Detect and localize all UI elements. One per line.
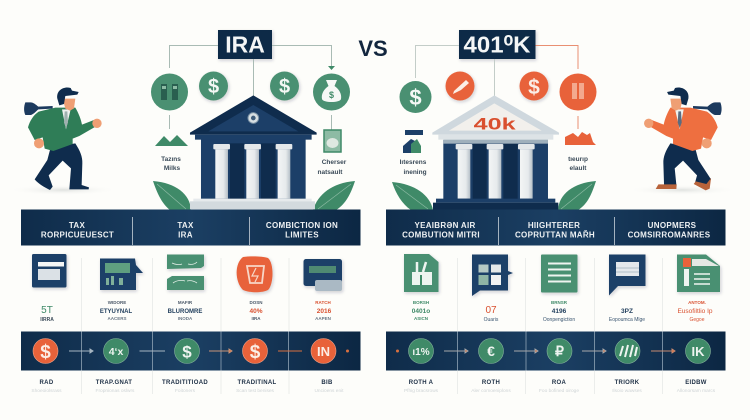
stat: column 5 [677,300,713,323]
stat: column 1: 5T [41,305,53,316]
stat: column 4: 3PZ [621,308,633,315]
stat: column 1: 0401o [412,308,430,315]
stat: column 2 [100,300,132,321]
stat: column 5: RATCH [315,300,331,305]
caption 1: RAD [40,380,54,386]
caption 3 [162,380,208,394]
caption 3: TRADITITIOAD [162,380,208,386]
icon: peso coin: ₽ [555,343,564,359]
stat: column 4: Eopoumca Mlge [609,317,645,323]
icon: navy card [304,259,342,291]
arrow 1 [69,349,93,353]
caption 5: Uncioens enit [314,388,344,394]
arrow 3 [209,349,232,353]
caption 1: Pfhig bracsrows [404,388,439,394]
caption 1: Shoeoiolsrass [31,388,62,394]
stat: column 4 [609,308,645,323]
stat labels: 401K [412,300,713,323]
stat: column 5: ANTOM. [688,300,706,305]
text: tax column 2: IRA [178,230,193,240]
caption 2: Aler comoeniplons [471,388,511,394]
icon: dollar coin left: $ [208,76,219,98]
stat: column 3: INODA [178,316,193,321]
stat: column 2: Ouaris [484,317,499,323]
stat: column 2: WIDORE [108,300,126,305]
caption 2 [471,380,511,394]
captions: 401K [404,380,716,394]
stat: column 2: 07 [485,305,497,316]
caption 2 [96,380,135,394]
text: tax column 2: TAX [177,221,194,230]
icon: orange dollar coin: $ [528,76,540,99]
stat: column 1 [40,305,54,323]
stat: column 1: BORSH [413,300,429,305]
caption 3 [539,380,579,394]
caption 1: ROTH A [409,380,434,386]
icon: navy chart bubble [100,258,143,290]
icon: navy note bubble [609,254,646,296]
text: yearly contribution: YEAIBRƏN AIR [414,221,476,230]
caption 4 [236,380,277,394]
icon: orange dollar [33,338,58,364]
arrow 4 [278,350,302,352]
leaf: right [313,181,355,210]
text: employer: COMSIRROMANRES [628,230,711,240]
icon: 4x coin [104,338,128,364]
icon: orange coin slash [446,72,474,100]
person: green suit [8,88,118,195]
caption 2: ROTH [482,380,500,386]
caption 3: Foitoners [175,388,196,394]
panel: IRA flow strip [21,332,360,370]
icon: orange dollar coin [520,72,548,100]
stat: column 5: AAPEN [315,316,331,321]
icon: orange dollar: $ [250,342,261,363]
icon: orange city [565,132,596,145]
caption 1 [31,380,62,394]
icon row: 401K [404,254,720,296]
text: contribution limits: LIMITES [285,230,319,240]
stat: column 3 [543,300,575,323]
icon: UK coin [686,338,710,364]
caption 2: TRAP.GNAT [96,380,132,386]
caption 4: TRADITINAL [238,380,277,386]
caption 4: Scan test benises [236,388,275,394]
icon: peso coin [547,338,572,364]
caption 4 [612,380,642,394]
caption 4: Ilsoio wawses [612,388,642,394]
leaf: right [558,181,596,210]
icon: navy form [32,254,66,288]
arrow 1 [444,349,468,353]
label: Investors inening: inening [403,169,427,176]
icon: percent coin: ı1% [412,347,430,358]
stat: column 2: AACERS [107,316,127,321]
arrow 3 [582,349,606,353]
icon: green cup document [404,254,438,292]
text: higher match: COPRUTTAN MAŘH [515,230,595,240]
title: VS: VS [358,36,388,61]
caption 5: BIB [321,380,333,386]
panel: IRA illustration [151,30,355,210]
stat: column 4: DOSN [249,300,263,305]
heading: 401K: 401⁰K [464,32,531,58]
label: Heurip Elault: elault [570,165,587,172]
captions: IRA [31,380,344,394]
panel: 401K flow strip [386,332,726,370]
caption 5: EIDBW [685,380,707,386]
icon: green report [677,254,720,292]
icon: euro coin [478,338,504,364]
bank building: IRA [190,95,317,209]
icon: green panels [167,254,204,290]
label: Investors inening: Iıtesrens [400,159,427,166]
stat: column 1: ASICN [414,316,428,321]
caption 3: ROA [552,380,566,386]
arrow 2 [140,350,165,352]
stat: column 4: 40% [249,308,263,315]
label: Heurip Elault: tıeurıp [568,156,588,163]
caption 5: Allonorsam marcs [677,388,716,394]
stat: column 4: IIRA [252,316,261,321]
stat: column 2 [484,305,499,323]
icon: dollar coin right: $ [279,76,290,98]
panel: 401K illustration [392,30,596,210]
bank building: 401K [432,95,559,210]
heading: IRA [218,30,272,59]
arrow 2 [514,349,538,353]
stat: column 3 [168,300,202,321]
label: Cherser natsault: natsault [318,169,343,176]
connector lines: IRA [170,46,335,130]
icon: mountains [155,135,188,146]
caption 5 [314,380,344,394]
text: tax column 1: TAX [69,221,86,230]
label: Tazins Milks: Tazıns [161,156,181,163]
icon: document [324,130,341,152]
text: tax column 1: RORPICUEUESCT [41,230,114,240]
leaf: left [153,181,191,210]
icon: orange badge [237,256,272,292]
arrow 4 [651,349,675,353]
stat: column 5: 2016 [317,308,332,315]
icon: navy grid bubble [472,254,513,296]
caption 2: Fropnionas oslwrs [96,388,135,394]
icon: mini chart green [403,130,423,153]
label: Cherser natsault: Cherser [322,159,347,166]
icon: UK coin: IK [692,344,705,359]
text: contribution limits: COMBICTION ION [266,221,338,230]
icon: money bag [313,74,350,110]
stat: column 3: Oonpengiction [543,317,575,323]
arrow dot [396,350,399,352]
icon: orange IN coin [311,338,336,364]
caption 4: TRIORK [615,380,640,386]
icon: green dollar: $ [182,342,192,362]
stat: column 4 [249,300,263,321]
icon: green dollar [174,338,200,364]
icon: percent coin [408,338,434,364]
caption 1 [404,380,439,394]
icon: green chart coin [151,74,188,110]
icon: dollar coin green: $ [409,85,422,110]
connector lines: 401K [416,46,578,129]
stat: column 5 [315,300,332,321]
leaf: left [392,182,433,210]
icon: 4x coin: 4‘x [109,346,123,358]
stat: column 1 [412,300,430,321]
stat: column 3: BRNSR [551,300,568,305]
icon: orange dollar: $ [40,342,51,363]
person: orange suit [627,88,737,195]
stat: column 5: Eusofiltlio Ip [677,308,713,315]
text: yearly contribution: COMBUTION MITRI [402,230,480,240]
icon: euro coin: € [487,343,495,359]
icon: stripes coin [615,338,640,364]
icon: dollar coin left [199,72,228,100]
caption 3: Foo bofined oiroge [539,388,579,394]
stat: column 3: MAFIR [178,300,193,305]
stat: column 1: IIRRA [40,317,54,323]
icon: dollar coin green [400,81,432,113]
icon row: IRA [32,254,342,292]
column dividers [82,258,662,394]
icon: orange pause coin [560,74,596,110]
text: higher match: HIIGHTERER [528,221,580,230]
panel: 401K header bar [386,210,726,246]
icon: dollar coin right [270,72,299,100]
heading: IRA: IRA [225,32,265,58]
label: Tazins Milks: Milks [164,165,181,172]
panel: IRA header bar [21,210,360,246]
stat: column 3: BLUROMRE [168,309,202,315]
bank building: 401K: 40k [474,114,517,133]
stat: column 5: Gegoe [689,317,705,323]
icon: orange dollar [242,338,268,364]
icon: money bag: $ [329,90,334,100]
icon: orange IN coin: IN [317,344,330,359]
stat labels: IRA [40,300,332,323]
stat: column 2: ETYUYNAL [100,309,132,315]
arrow dot [346,350,349,352]
caption 5 [677,380,716,394]
icon: green list [541,254,578,292]
text: employer: UNOPMERS [648,221,697,230]
stat: column 3: 4196 [552,308,567,315]
